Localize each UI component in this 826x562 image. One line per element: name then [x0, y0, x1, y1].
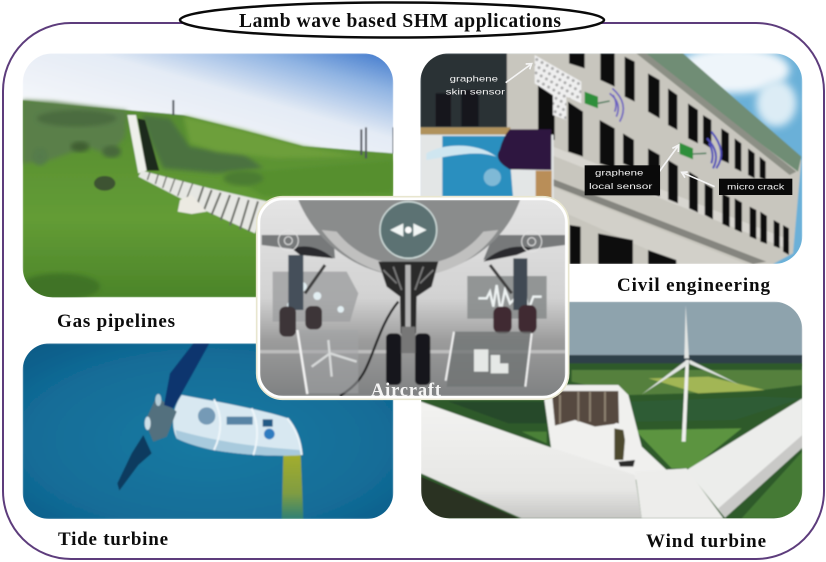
green sensor 2 [680, 143, 693, 159]
distant tower [682, 360, 689, 442]
label: gas pipelines: Gas pipelines [57, 311, 175, 332]
left big blade [421, 402, 642, 518]
label: graphene skin sensor [446, 76, 505, 94]
panel: aircraft photo [257, 197, 569, 399]
lower blade [117, 435, 152, 491]
right gear [513, 258, 527, 310]
label: graphene local sensor [585, 165, 660, 195]
body logos [198, 407, 275, 439]
wave rings 1 [610, 88, 623, 122]
upper pipeline [127, 115, 147, 173]
title: Lamb wave based SHM applications [239, 11, 561, 32]
arrow: micro crack [682, 172, 715, 187]
translucent card left [273, 272, 358, 322]
pipeline support block [178, 195, 207, 214]
label: tide turbine: Tide turbine [58, 529, 168, 550]
background [260, 200, 565, 396]
tan strip [420, 127, 510, 135]
hub [635, 468, 723, 518]
water [23, 343, 393, 519]
green sensor 1 [585, 92, 598, 108]
label: micro crack [719, 179, 792, 195]
waveform [478, 285, 542, 312]
bars [474, 349, 508, 373]
upper blade [164, 343, 209, 408]
nose gear [378, 262, 438, 333]
windows [538, 53, 789, 264]
green cornice [640, 53, 801, 172]
fuselage [298, 200, 520, 277]
graphene skin sensor mesh [535, 55, 581, 120]
yellow support pillar [282, 455, 303, 519]
left gear [288, 255, 303, 310]
panel: wind turbine photo [421, 302, 802, 520]
top scan circle [380, 202, 437, 258]
distant hill [183, 116, 363, 158]
wave rings 2 [707, 132, 721, 168]
label: aircraft: Aircraft [371, 381, 442, 401]
right big blade [687, 398, 802, 518]
bottom left holo card [297, 330, 358, 393]
label: graphene local sensor: graphene [595, 168, 644, 178]
poles [173, 100, 394, 158]
ledge bands [551, 146, 790, 248]
lower pipeline [138, 171, 268, 233]
lower right field [742, 452, 802, 518]
bush [94, 176, 115, 191]
wings [262, 235, 335, 258]
blue poster [442, 136, 513, 197]
label: graphene skin sensor: skin sensor [446, 86, 505, 96]
pipeline ribs [147, 172, 258, 231]
horizon [421, 355, 802, 367]
arrow: skin sensor [506, 64, 532, 83]
third blade root opening [544, 385, 668, 482]
hose [340, 302, 398, 396]
title ellipse [180, 2, 604, 38]
label: wind turbine: Wind turbine [646, 531, 766, 552]
panel: civil engineering photo [420, 47, 802, 264]
building facade [506, 53, 801, 264]
nacelle body [173, 395, 302, 456]
pipeline shadow cut [138, 118, 159, 171]
panel border [257, 197, 569, 399]
bottom right holo card [447, 332, 532, 387]
body ribs [214, 399, 302, 455]
translucent card right [467, 276, 547, 319]
purple cloth [498, 129, 551, 170]
dark room backdrop [420, 53, 507, 127]
distant blades [642, 305, 740, 394]
sky [420, 53, 802, 264]
wing sound rings [278, 231, 542, 252]
sky [23, 53, 393, 160]
label: micro crack: micro crack [727, 182, 785, 192]
sky [421, 302, 802, 357]
rotor hub [145, 397, 177, 442]
label: graphene skin sensor: graphene [450, 73, 498, 83]
sensor dots [287, 282, 344, 313]
worker [614, 428, 625, 460]
label: graphene local sensor: local sensor [589, 181, 653, 191]
label: civil engineering: Civil engineering [617, 275, 770, 296]
scrub on left slope [23, 100, 127, 163]
panel: gas pipelines photo [20, 53, 394, 300]
arrow: local sensor [658, 145, 679, 173]
dark vegetation on right slope [142, 115, 263, 173]
fields [421, 363, 802, 520]
hillside and grass [23, 100, 393, 297]
panel: tide turbine photo [23, 343, 393, 519]
dark lower-left corner [26, 272, 100, 298]
trees bottom left [421, 477, 518, 518]
white poster surround [420, 135, 554, 201]
